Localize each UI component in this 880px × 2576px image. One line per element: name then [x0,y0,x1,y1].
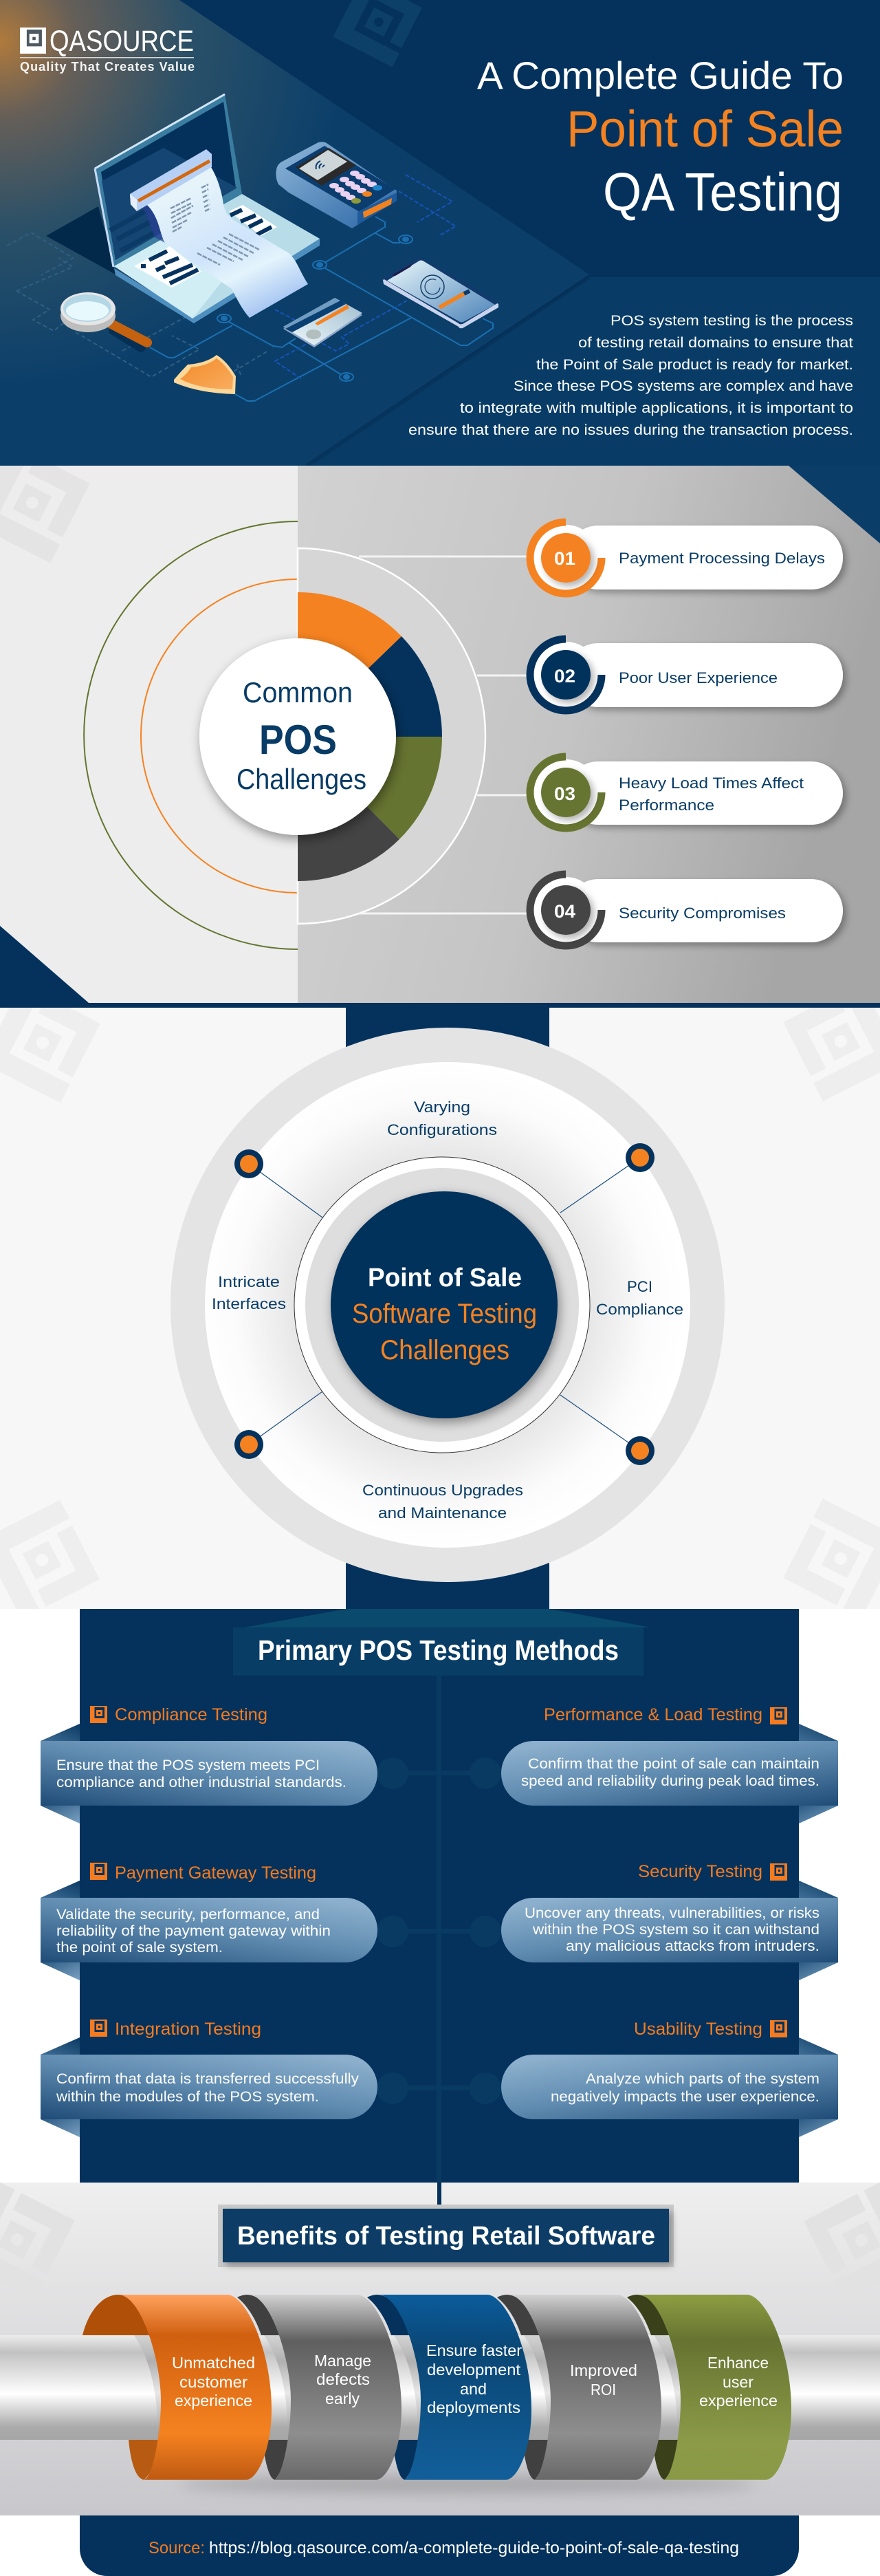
ribbon: ensure faster development and deployments: development [427,2361,521,2379]
item 03: Heavy Load Times Affect [619,775,804,792]
ribbon: enhance user experience [638,2295,791,2480]
label: intricate interfaces [212,1273,286,1312]
title: Point of Sale [566,100,844,158]
ribbon: improved ROI: Improved [570,2361,637,2379]
illustration: POS network circuit lines [7,175,493,401]
method: compliance testing: Compliance Testing [115,1705,267,1724]
center label: Common [243,676,353,708]
item 01 [530,522,843,594]
method: payment gateway testing: reliability of the payment gateway within [56,1923,331,1939]
method: integration testing: within the modules of the POS system. [56,2089,319,2105]
method: usability testing: negatively impacts the user experience. [551,2089,820,2105]
ribbon: manage defects early: early [325,2390,360,2407]
heading banner: Primary POS Testing Methods [258,1634,619,1666]
method: integration testing: Integration Testing [115,2020,261,2039]
method: compliance testing: compliance and other industrial standards. [56,1775,346,1790]
panel: point of sale software testing challenges [0,982,880,1619]
method: security testing: Security Testing [638,1862,762,1881]
label: intricate interfaces: Interfaces [212,1295,286,1312]
icon: laptop [46,94,320,323]
method: payment gateway testing [41,1863,377,1980]
icon: printed receipt [130,149,308,318]
center label: POS [259,717,337,763]
method: integration testing: Confirm that data is transferred successfully [56,2071,360,2087]
icon: shield [174,355,236,394]
method: payment gateway testing: Validate the security, performance, and [56,1907,320,1923]
method: performance and load testing: Confirm that the point of sale can maintain [528,1756,820,1772]
method: performance and load testing: speed and reliability during peak load times. [521,1773,820,1789]
item 04: 04 [554,901,575,922]
item 04: Security Compromises [619,905,786,922]
source label: Source: [148,2539,205,2557]
center label: Point of Sale [368,1264,522,1292]
label: continuous upgrades: Continuous Upgrades [362,1482,523,1499]
ribbon: unmatched customer experience: customer [179,2373,248,2391]
heading banner [218,2205,674,2267]
heading banner [233,1609,651,1676]
title: A Complete Guide To [477,54,844,97]
label: continuous upgrades: and Maintenance [378,1504,507,1522]
center label: Challenges [380,1335,509,1365]
method: performance and load testing [501,1705,838,1823]
icon: payment terminal [276,142,397,228]
ribbon floor shadow [179,2475,756,2494]
method: performance and load testing: Performance & Load Testing [544,1705,762,1724]
title: QA Testing [603,162,842,222]
center label: Challenges [236,763,366,795]
intro paragraph: ensure that there are no issues during the transaction process. [408,422,853,438]
method: integration testing [41,2020,377,2137]
label: varying configurations: Configurations [387,1121,497,1138]
method: security testing [501,1862,838,1980]
watermark: section logo mark [0,466,89,563]
logo tagline: Quality That Creates Value [20,60,195,74]
intro paragraph [408,313,853,438]
ribbon: ensure faster development and deployments [378,2295,531,2480]
panel: common POS challenges [0,444,880,1003]
intro paragraph: of testing retail domains to ensure that [578,335,853,351]
item 02: Poor User Experience [619,669,778,686]
method: usability testing [501,2020,838,2137]
method: security testing: any malicious attacks from intruders. [566,1938,820,1954]
source url: https://blog.qasource.com/a-complete-guide-to-point-of-sale-qa-testing [209,2539,739,2557]
icon: credit card [283,298,362,347]
intro paragraph: Since these POS systems are complex and have [514,378,853,394]
method: payment gateway testing: Payment Gateway Testing [115,1863,316,1883]
ribbon: improved ROI: ROI [591,2381,616,2399]
item 01: Payment Processing Delays [619,550,825,567]
method: usability testing: Analyze which parts of the system [586,2071,820,2087]
panel: primary POS testing methods [0,1609,880,2183]
ribbon: improved ROI [508,2295,661,2480]
icon: smartphone [383,258,498,328]
logo [20,25,195,74]
method: payment gateway testing: the point of sale system. [56,1940,223,1956]
watermark: hero logo mark [333,0,423,67]
item 02 [530,639,843,711]
ribbon: unmatched customer experience [118,2295,272,2480]
chart: concentric circles and donut [84,521,485,949]
method: compliance testing [41,1705,377,1823]
panel: benefits of testing retail software [0,2180,880,2515]
ribbon: manage defects early: Manage [314,2352,371,2370]
watermarks: side logo marks [0,2183,880,2230]
center label [236,676,366,795]
pipe [0,2335,880,2440]
icon: magnifying glass [60,292,147,347]
label: PCI compliance: PCI [627,1278,652,1295]
label: PCI compliance [596,1278,683,1318]
ribbon: manage defects early [248,2295,402,2480]
ribbon: ensure faster development and deployments: deployments [427,2399,520,2416]
ribbon: manage defects early: defects [316,2370,370,2388]
label: continuous upgrades [362,1482,523,1522]
method: security testing: within the POS system so it can withstand [532,1922,820,1938]
method: compliance testing: Ensure that the POS system meets PCI [56,1757,320,1773]
item 01: 01 [554,548,575,569]
item 03: Performance [619,797,714,814]
method: security testing: Uncover any threats, vulnerabilities, or risks [525,1905,820,1921]
item 03: 03 [554,783,575,804]
ribbon: enhance user experience: user [723,2373,754,2391]
markers [234,1143,654,1465]
heading banner: Benefits of Testing Retail Software [237,2222,655,2251]
intro paragraph: POS system testing is the process [610,313,853,329]
logo wordmark: QASOURCE [50,25,194,58]
item 02: 02 [554,666,575,686]
intro paragraph: to integrate with multiple applications, it is important to [460,400,853,416]
item 03 [530,757,843,828]
center label [352,1264,537,1365]
diagram: concentric wheel [170,1028,725,1582]
ribbon: ensure faster development and deployments: Ensure faster [426,2341,522,2359]
ribbon: unmatched customer experience: Unmatched [172,2354,255,2372]
intro paragraph: the Point of Sale product is ready for market. [536,357,853,373]
panel: source footer [80,2515,799,2576]
title [477,54,844,222]
method: usability testing: Usability Testing [634,2020,762,2039]
watermarks: corner logo marks [0,982,880,1619]
center circle [199,638,396,835]
label: varying configurations: Varying [414,1098,470,1116]
label: varying configurations [387,1098,497,1138]
logo mark [20,28,46,54]
ribbon: enhance user experience: experience [699,2392,778,2410]
center label: Software Testing [352,1299,537,1329]
ribbon: unmatched customer experience: experience [175,2392,252,2410]
ribbon: enhance user experience: Enhance [707,2354,769,2372]
center circle [331,1191,558,1418]
label: intricate interfaces: Intricate [218,1273,280,1290]
hero panel [0,0,880,466]
item 04 [530,874,843,946]
ribbon: ensure faster development and deployments: and [460,2380,487,2398]
ribbon back flaps [82,2295,681,2480]
label: PCI compliance: Compliance [596,1301,683,1318]
